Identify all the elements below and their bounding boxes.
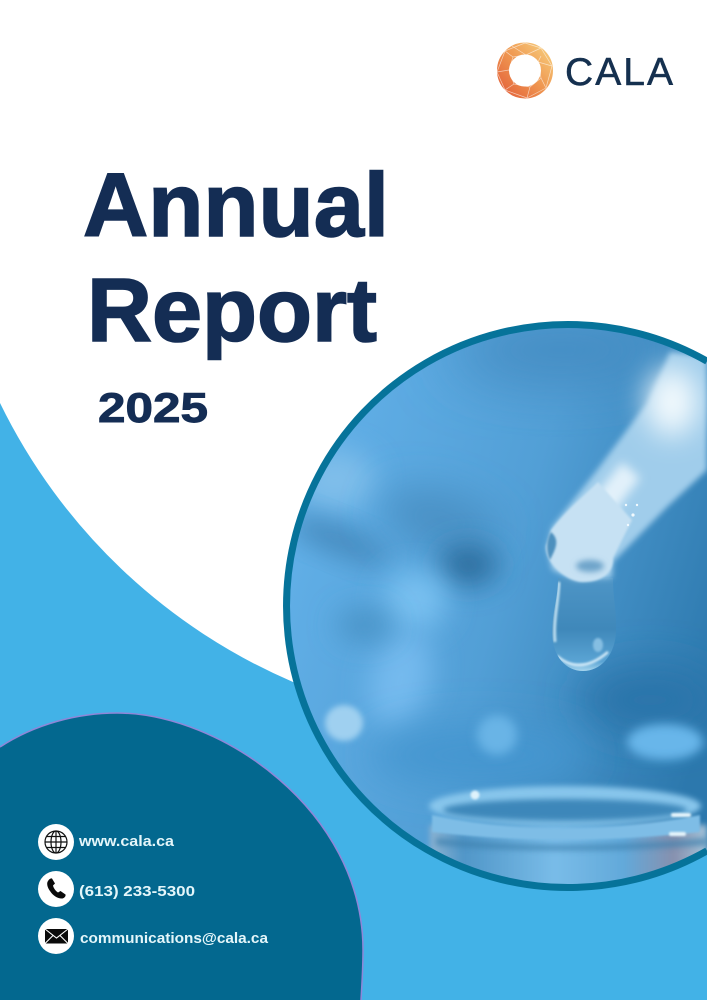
logo wordmark: CALA — [565, 51, 673, 94]
title: Annual Report — [83, 156, 389, 361]
icon: envelope — [38, 918, 74, 954]
water drop — [552, 578, 616, 671]
contact: phone — [38, 871, 195, 907]
contact list — [38, 824, 269, 954]
title: Annual Report: Annual — [83, 156, 389, 256]
logo ring icon — [497, 43, 552, 98]
photo fill — [287, 324, 707, 888]
light blue curved background shape — [0, 403, 707, 1000]
blurred lab background — [285, 320, 707, 785]
icon: phone — [38, 871, 74, 907]
contact: email — [38, 918, 269, 954]
dark blue contact panel — [0, 713, 363, 1000]
pipette — [546, 352, 707, 582]
circular photo: pipette and drop — [285, 320, 707, 895]
phone text: (613) 233-5300 — [79, 883, 195, 900]
contact: website — [38, 824, 175, 860]
website text: www.cala.ca — [78, 833, 175, 850]
logo: CALA — [497, 43, 673, 98]
title: Annual Report: Report — [87, 261, 377, 361]
beaker — [429, 786, 707, 895]
photo ring — [287, 324, 707, 888]
year: 2025: 2025 — [98, 384, 208, 431]
icon: globe — [38, 824, 74, 860]
email text: communications@cala.ca — [80, 930, 269, 947]
